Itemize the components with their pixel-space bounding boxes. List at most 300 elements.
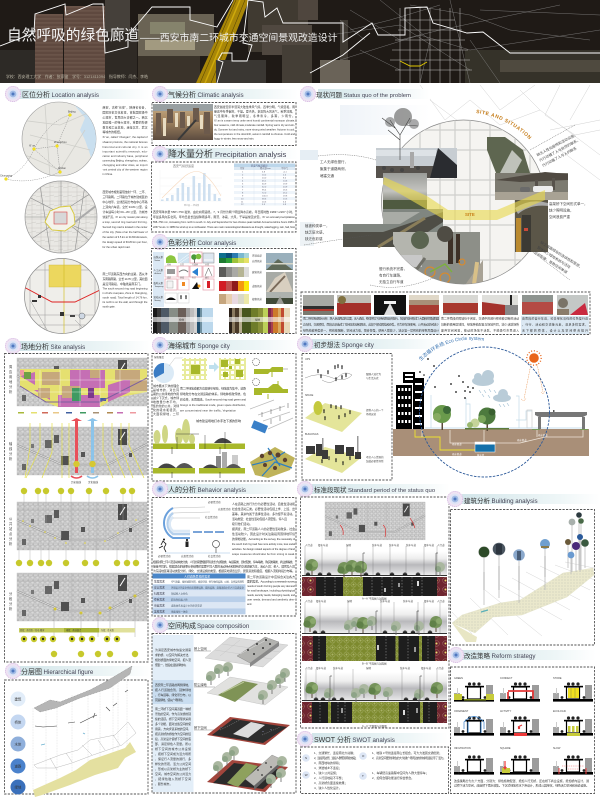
map: traffic flow with arrows xyxy=(17,418,147,484)
text: sponge right column: 绿地较分布在交通运输的体系。绿地种植较传统，色 xyxy=(180,391,246,396)
bar chart: rainfall xyxy=(153,163,228,208)
diagram: buildings: 加载必要性场所 xyxy=(366,459,384,463)
color icons grid: 天空 xyxy=(180,262,184,266)
left text column: ，行车道等，绿化带分布，以 xyxy=(155,692,191,697)
text: south ring road: its north is on the wall, and through the xyxy=(102,300,148,304)
strategy description text: 改造策略分为九个方面，分别为：绿色植物配置、增加人行天桥，还在桥下商业设施，增加桥内设计，通 xyxy=(454,778,589,783)
photo: street with parked scooters xyxy=(376,148,457,178)
left text column: 为满足西安城市快速交通需 xyxy=(155,647,191,652)
section a-a: 快车车道 xyxy=(372,543,383,547)
text blocks under photos: 由南段的自行车道，可沿绿化沿线的红色慢行道 xyxy=(522,316,588,320)
vertical map labels: 线 xyxy=(9,446,13,451)
pipes and storage tank: 雨水管道 xyxy=(517,438,527,442)
left text column: 部，满足绿色人流量。所以 xyxy=(155,741,191,746)
swot text: 1、交通繁忙、连接南北大动脉； xyxy=(314,750,356,755)
table: human needs xyxy=(152,573,246,614)
text: behavior table side: user needs, demand and aesthetic dem- xyxy=(247,598,295,602)
layer: combined xyxy=(207,746,288,792)
text: precipitation description: 西安年降水量 558～750 毫米，由北向南递增。7、9 月份为两个明显降水高峰。年日照时数 1983～2267 小时， xyxy=(153,209,295,214)
text: sponge left column: 期约公共绿地的作用 xyxy=(153,391,179,396)
pins with photos xyxy=(478,512,589,605)
people icons row xyxy=(158,538,230,558)
swot icons: S xyxy=(305,756,307,760)
callout: seating: 行行动植了人与人的联系 xyxy=(541,145,578,168)
map circle with photos xyxy=(343,108,568,284)
layer circles: 桥体 xyxy=(14,720,22,724)
callout: workers parking xyxy=(318,155,376,178)
section c-c xyxy=(302,666,447,728)
text: sponge left column: 城市蓄水下渗的理念 xyxy=(153,383,179,388)
text: sponge right column: foreign to the traditional mode, green space distribution, xyxy=(180,403,246,407)
left text column: 南二环桥下空间其双面一种桥 xyxy=(155,706,191,711)
text: south ring road: The south second ring road beginning xyxy=(102,286,148,290)
layer: road network xyxy=(34,722,136,770)
callout: seating: 缺乏人性化座椅和活动设施， xyxy=(535,132,578,157)
strategy store xyxy=(553,677,593,702)
callout: green continuity: 空间衔接，导致空间单调 xyxy=(533,250,569,275)
layer: green space xyxy=(206,662,290,705)
table: human needs: 归属需求 xyxy=(154,591,165,595)
strategy description text: 过桥下活力空间，改造桥下雨水收集。下沉式绿地作水下渗设计，形成公园绿化，绿色活力空间和街道设施。 xyxy=(454,782,589,788)
section a-a: 绿地 xyxy=(346,543,352,547)
heading: water scenarios: 城市建设场地打水手法下游的影响 xyxy=(196,418,241,423)
section c-c: C—C' 平面图与剖面图 xyxy=(362,724,387,728)
photo: city skyline xyxy=(153,104,213,140)
text: sponge left column: 减少下沉式，城市绿 xyxy=(153,395,179,400)
map: zoning: 东段：住宅区 xyxy=(101,628,115,632)
strategy description text xyxy=(454,778,589,788)
left text column: 把高架桥的桥柱作为空间的链 xyxy=(155,731,191,736)
pipes and storage tank: 雨水管道 xyxy=(452,442,462,446)
table: monthly rainfall: 11 xyxy=(241,201,244,203)
left text column: 求的桥，以空间为解决方法， xyxy=(155,652,191,657)
section b-b: 慢车车道 xyxy=(316,599,327,603)
section a-a: 人行道 xyxy=(305,543,313,547)
swot text: 2、人行道地段不平整； xyxy=(314,775,345,780)
callout: green monotony xyxy=(304,223,372,245)
swot text: 1、车辆绕高速路程中空间为人群大量停车； xyxy=(372,770,429,775)
panel: space composition xyxy=(152,617,298,793)
strategy green xyxy=(454,677,494,702)
section a-a: 慢车车道 xyxy=(318,543,329,547)
panel: standard period of the status quo xyxy=(297,481,450,728)
diagram: space: 场地运营 xyxy=(366,412,377,416)
section c-c: 慢车车道 xyxy=(421,666,432,670)
text: Xi'an intro: cation and industry base, peripheral xyxy=(102,154,148,158)
text: precipitation description xyxy=(153,209,295,229)
layer: bridge xyxy=(35,690,128,727)
table: monthly rainfall: 2 xyxy=(242,174,244,176)
icon: sun xyxy=(521,351,545,401)
table: monthly rainfall: 平均/℃ xyxy=(281,166,289,170)
layer labels: 桥上空间 xyxy=(194,646,207,651)
text: ring road plan: the section of 3.5 km to 34.84 kilometers, xyxy=(102,235,148,239)
strategy ornament: ORNAMENT xyxy=(454,710,469,713)
heading: climate: 气候分析Climatic analysis xyxy=(168,90,244,99)
layer labels xyxy=(194,646,222,730)
color swatches: 环境色彩 xyxy=(252,254,263,258)
table: human needs: 生理需求 xyxy=(154,579,165,583)
left text column: 把人行道融合到，延伸绿地 xyxy=(155,687,191,692)
table: human needs: 地面绿化一体化 xyxy=(171,609,188,613)
callout: seating xyxy=(530,125,584,168)
callout: under bridge: 高架桥下空间形式单一， xyxy=(549,201,588,206)
callout: green continuity xyxy=(530,240,584,280)
swot text xyxy=(314,750,446,790)
table: monthly rainfall: 降水量/mm xyxy=(260,166,271,170)
table: monthly rainfall: 10.2 xyxy=(262,174,267,176)
panel: hierarchical figure xyxy=(4,663,150,797)
curved heading: site and situation: SITE AND SITUATION xyxy=(476,110,532,140)
vertical map labels: 分 xyxy=(9,536,13,541)
table: monthly rainfall: 72.0 xyxy=(262,192,267,194)
left text column: 规划桥面的绿地空间，把人流 xyxy=(155,657,191,662)
table: monthly rainfall: 3 xyxy=(242,177,244,179)
heading: sponge city: 海绵城市Sponge city xyxy=(168,341,231,350)
callout: workers parking: 堵塞交通 xyxy=(320,173,334,178)
text: precipitation description: 2267 hours. In 1985 the wind up to a northeaster. There are main meteorological disasters as drought, waterlogging, rain, hail, frost xyxy=(153,225,295,229)
table: human needs: 道路体系和设计中的审美需求 xyxy=(171,603,203,607)
map: bus stations xyxy=(16,488,147,566)
heading: standard period: 标准段现状 Standard period of the status quo xyxy=(314,485,436,494)
layer: under bridge xyxy=(207,717,290,745)
illustration: eco cycle section xyxy=(393,336,589,478)
lattice before xyxy=(182,358,207,380)
left text column: 聚集一，然后在连续绿地中。 xyxy=(155,662,188,667)
color icons grid xyxy=(165,252,214,303)
layer labels: 桥下空间 xyxy=(194,725,207,730)
strategy slow: SLOW xyxy=(553,747,561,750)
color icons grid: 桥梁 xyxy=(180,276,184,280)
table: human needs: 人对道路景观的需求 xyxy=(184,573,210,578)
text: behavior table side: needs, security needs, belonging needs, and xyxy=(247,593,296,597)
table: human needs: 舒适性和私人性 xyxy=(171,597,188,601)
callout: under bridge: 空间浪费严重 xyxy=(549,214,570,219)
section b-b xyxy=(302,599,447,666)
map: zoning xyxy=(17,573,147,657)
people icons row: 自发性活动 xyxy=(181,554,194,558)
strategy connect: CONNECT xyxy=(500,677,513,680)
text: sponge right column: 南二环绿地成都方向较狭窄绿地，绿地较为集中，道路 xyxy=(180,386,246,390)
text: south ring road: 东南路南路，全长 14.76 公里，其北面 xyxy=(102,276,148,281)
strategy square xyxy=(500,747,540,775)
heading: initial idea: 初步想法Sponge city xyxy=(314,340,375,349)
label: site: SITE xyxy=(465,212,475,217)
table: monthly rainfall: 2.4 xyxy=(283,174,287,176)
text: sponge left column: 集约化的公共，对绿 xyxy=(153,403,179,408)
text: climate description: 量适中冬季偏寒，干燥。夏炎热，多雷阵大风天气，秋季凉爽， xyxy=(214,108,295,114)
swot text: 1、缺少公共设施； xyxy=(314,770,339,775)
text: ring road plan: Second ring road is located in the center xyxy=(102,225,148,229)
pipes and storage tank: 雨水管道 xyxy=(538,433,548,437)
text: ring road plan: 三环路网。二环路位于城市建成区的 xyxy=(102,194,148,199)
section c-c: 人行道 xyxy=(305,666,313,670)
table: human needs: 发展需求 xyxy=(154,609,165,613)
panel: building analysis xyxy=(447,491,600,645)
section c-c: 绿地 xyxy=(366,666,372,670)
text: sponge right column: 彩也单，无雨露感。South second ring road green and xyxy=(180,396,246,402)
heading: hierarchical: 分层图Hierarchical figure xyxy=(21,667,94,676)
section b-b: 快车车道 xyxy=(403,599,414,603)
photo strip panel xyxy=(301,292,590,334)
strategy connect xyxy=(500,677,540,702)
diagram: buildings: 考虑人心资源的 xyxy=(366,455,384,459)
map: zoning: 西段：商住区 / 住宅·教育 xyxy=(20,628,45,632)
map: Xi'an ring roads xyxy=(25,180,97,255)
text: south ring road xyxy=(102,271,148,308)
color element categories xyxy=(153,252,164,307)
diagram: space: SPACE xyxy=(305,394,314,397)
text: behavior right column: 人在道路上的行为分为必要性活动、自发性活动和 xyxy=(232,501,295,506)
bar chart: rainfall: 降水量 — 舒适度 xyxy=(184,203,199,207)
left text column: ，服务城市。 xyxy=(155,781,172,786)
map: traffic flow with arrows: 文化轴线 xyxy=(88,480,99,484)
map: zoning: 南段：商业混合 xyxy=(66,628,82,632)
ring chart xyxy=(164,500,231,538)
text: behavior right column: 活动类型：社会性活动包括人流密集，停人且 xyxy=(232,516,287,521)
swot text: 2、如何合理功能进行综合整合。 xyxy=(372,775,414,780)
text: behavior right column: 社会性活动三类。必要性活动包括上学、上班、出 xyxy=(232,506,295,511)
table: monthly rainfall: 8 xyxy=(242,192,244,194)
vertical guide lines xyxy=(33,676,127,790)
bridge xyxy=(532,410,588,430)
diagram: ups xyxy=(305,358,382,382)
color swatches: 道路色彩 xyxy=(252,284,263,288)
panel: sponge city xyxy=(152,337,298,481)
vertical map labels xyxy=(9,364,13,611)
text: Xi'an intro: important scientific research, edu- xyxy=(102,150,148,154)
left text column: 接，高架设计使桥下空间的底 xyxy=(155,736,191,741)
text: sponge right column xyxy=(180,386,246,412)
color icons grid: 行道树 xyxy=(192,262,198,266)
section b-b: 慢车车道 xyxy=(424,599,435,603)
color swatches: 建筑色彩 xyxy=(252,270,263,274)
heading: color: 色彩分析Color analysis xyxy=(168,238,236,247)
text: south ring road: south road). Total length of 14.76 km, xyxy=(102,296,148,300)
table: human needs: 尊重需求 xyxy=(154,597,165,601)
table: human needs: 环境设计的安全性和无障碍设施、避险设施、道路改造中的人行交通安全 xyxy=(171,585,245,589)
strategy activity: ACTIVITY xyxy=(500,710,512,713)
text: precipitation description: 年最多风向东北风。年均日最长连续降雨多年，雨涝、冰雹、大风，干旱是常见灾害。Xi' an annual precipitation xyxy=(153,214,295,219)
callout: green monotony: 缺乏色彩感 xyxy=(305,236,323,241)
layer circles xyxy=(10,692,26,794)
color icons grid: 水体 xyxy=(205,262,209,266)
text: south ring road: in chuifu overpass, Zone in Xiangfeng, xyxy=(102,291,148,295)
text blocks under photos: 南二环南段的围墙处于闭塞，交通中的通行视线被切断的活动 xyxy=(441,316,519,320)
table: monthly rainfall: 19.9 xyxy=(283,183,288,185)
text: Xi'an intro: 西安，古称“长安”，陕西省省会， xyxy=(102,104,148,110)
text: behavior table side: and. xyxy=(247,602,252,606)
light skyline xyxy=(425,395,585,428)
table: monthly rainfall: 8.0 xyxy=(283,177,287,179)
table: monthly rainfall: 100.3 xyxy=(262,195,268,197)
table: human needs: 安全需求 xyxy=(154,585,165,589)
text: Xi'an intro: -ant central city of the western region xyxy=(102,168,148,172)
text: behavior right column: the south 2nd ring road has more activity more, less social xyxy=(232,542,295,546)
color icons grid: 绿地 xyxy=(167,262,171,266)
vertical map labels: 析 xyxy=(9,456,13,461)
text: Xi'an intro: 国家历史文化名城，首批国家级中 xyxy=(102,110,148,114)
text: ring road plan: 上双向六车道，全长 34.84 公里，设 xyxy=(102,204,148,209)
text: Xi'an intro: historical and cultural city. It is an xyxy=(102,145,148,149)
diagram: buildings: BUILDINGS xyxy=(305,433,319,436)
panel: reform strategy xyxy=(448,647,596,794)
pie chart: 绿色覆盖 xyxy=(154,355,165,359)
color swatches: 植物色彩 xyxy=(252,297,263,301)
text blocks under photos: 割断的使用区域性，绿地种植配置与场地共同，缺少活跃场所 xyxy=(441,322,519,326)
diagram: ups: 与生活方式 xyxy=(366,376,379,380)
text: climate description xyxy=(214,104,296,140)
text: ring road plan: 中心地带，全线四段分布在中心环路 xyxy=(102,199,148,204)
swot text: 4、缺少人性化设计。 xyxy=(314,785,342,790)
heading: building: 建筑分析Building analysis xyxy=(464,496,538,505)
vertical map labels: 析 xyxy=(9,606,13,611)
layer: green space xyxy=(33,742,136,797)
color element categories: 自然元素 xyxy=(154,255,164,259)
callout: green continuity: 缺乏道路绿化的连续性和景观， xyxy=(539,240,584,270)
color photos xyxy=(266,253,293,304)
photo: foggy road xyxy=(383,173,427,209)
text blocks under photos: ，行行、活动和交流等元素，满足多样需求， xyxy=(522,322,588,326)
color swatches xyxy=(219,253,263,304)
water network diagram xyxy=(250,400,293,433)
text: sponge left column: 是城市的，对比同 xyxy=(153,387,179,392)
text: behavior full width: 根据对南二环人流活动种类分类，人们的需要根据环境划分为通勤类、车运客类、街坊配类、停车等类、购买类等类、商业类等类、 xyxy=(153,559,295,564)
table: human needs: 审美需求 xyxy=(154,603,165,607)
icon: bare tree xyxy=(382,108,419,160)
vertical map labels: 轴 xyxy=(9,441,12,446)
heading: behavior: 人的分析Behavior analysis xyxy=(168,485,246,494)
swot text: 2、连接周边景、连接人群聚落南北地段； xyxy=(314,755,358,760)
color element categories: 临时元素 xyxy=(154,281,164,285)
table: monthly rainfall: 24.9 xyxy=(283,186,288,188)
callout: workers parking: 工人无绿色慢行， xyxy=(320,159,348,164)
text: sponge left column: 大面积绿地，二环 xyxy=(153,411,179,416)
color icons grid: 建筑 xyxy=(167,276,171,280)
table: monthly rainfall: 25.2 xyxy=(283,192,288,194)
table: monthly rainfall: 7 xyxy=(242,189,244,191)
text: behavior right column: 性活动较少。因此设计时关注路段周围绿地环境 xyxy=(232,531,295,536)
table: monthly rainfall: 58.6 xyxy=(262,198,267,200)
diagram: buildings xyxy=(305,433,384,473)
map: land use xyxy=(17,358,147,407)
map: China region: Beijing xyxy=(68,110,76,114)
left text column: 西安南二环道路的两侧绿地， xyxy=(155,682,191,687)
text: behavior right column: scape measures should also be from strong to weak. xyxy=(232,552,295,556)
text: ring road plan: for the urban rapid road. xyxy=(102,245,131,249)
swot text: 1、地铁 3 号线连接南山长组合，可大力发展交通优势； xyxy=(372,750,442,755)
text: behavior table side: for road landscape, including physiological xyxy=(247,588,295,592)
diagram: space: 提供人心的一个 xyxy=(366,408,384,412)
vertical map labels: 分 xyxy=(9,601,13,606)
heading: precipitation: 降水量分析 Precipitation analysis xyxy=(168,148,287,159)
section c-c: 人行道 xyxy=(436,666,444,670)
text blocks under photos: 高架柱，交通桥体，南段高架造成了空间压抑感和隔离，此段下部也围挡和杂乱，作为停车场使用，公共活动空间缺少 xyxy=(303,322,439,326)
strategy infiltration xyxy=(454,747,494,775)
swot icons: T xyxy=(362,774,364,778)
text: climate description: 西安属暖温带半湿润大陆性季风气候，四季分明，气候温和，雨 xyxy=(214,104,295,109)
section a-a: 慢车车道 xyxy=(424,543,435,547)
layer circles: 绿地 xyxy=(14,784,22,790)
highlighted road band xyxy=(383,177,545,220)
text: climate description: foggy in winter, less snow and rain. xyxy=(214,136,255,140)
text: behavior full width: 为东段地区等活动类型分析，绿化、交通设施的类型，根据实地调查显示，居民意愿积极度，根据人流和时段分布等。 xyxy=(153,568,295,573)
panel: climatic analysis xyxy=(152,86,298,146)
heading: location: 区位分析Location analysis xyxy=(22,90,99,99)
text blocks under photos: 南二环的场地现状分析：路人走道两边的立面，无人通道，整体环境下没有得到改善提升。东段的空间形成了大面积的围墙肌理 xyxy=(303,316,439,320)
text: Xi'an intro: 心城市，世界四大古都之一。西北 xyxy=(102,114,148,120)
text: climate description: 气温骤降，秋季雨明显，冬季寒冷，多雾，少雨雪。 xyxy=(214,113,295,118)
strategy square: SQUARE xyxy=(500,747,511,750)
ring chart: 社会性活动 xyxy=(205,515,218,519)
section a-a: 快车车道 xyxy=(406,543,417,547)
map: China region: Xi' an xyxy=(29,144,36,148)
text: Xi'an intro: chongqing and other cities, an import xyxy=(102,163,148,167)
section c-c: 慢车车道 xyxy=(316,666,327,670)
text: behavior right column: 的绿地功能。According to the survey, the necessity of xyxy=(232,536,295,541)
section b-b: 人行道 xyxy=(437,599,445,603)
left text column xyxy=(152,635,194,792)
left text column: 景色的空间，作为高架桥的延 xyxy=(155,711,191,716)
vertical map labels: 点 xyxy=(9,531,13,536)
diagram: space xyxy=(305,394,384,432)
text: behavior table side: 南二环的道路设计中应综合关注各方 xyxy=(247,574,295,579)
panel: status quo of the problem xyxy=(300,85,600,335)
map: China region: Zhengzhou xyxy=(54,141,67,144)
color element categories: Nature xyxy=(154,259,160,262)
table: monthly rainfall: 5 xyxy=(242,183,244,185)
vertical map labels: 周 xyxy=(9,364,12,369)
table: monthly rainfall: 52.0 xyxy=(262,186,267,188)
clouds and rain xyxy=(472,370,511,407)
text blocks under photos xyxy=(302,316,589,334)
left text column: 空间。城市空间的公共活力 xyxy=(155,771,191,776)
table: human needs: 空气质量、绿化/遮阴/光照、噪音控制、停车/休闲设施、公厕、自然及景观等 xyxy=(171,579,245,583)
left text column: 用需，方向步道系统的空间， xyxy=(155,726,191,731)
photo: road in fog with green belt xyxy=(343,209,443,247)
vertical map labels: 析 xyxy=(9,389,13,394)
table: monthly rainfall: 24.0 xyxy=(262,177,267,179)
text: climate description: dy, Summer hot and rainy, more strong wind weather. Autumn is cool, xyxy=(214,128,295,132)
text blocks under photos: 无下部的桥体，设计以及空间整合提升 xyxy=(522,328,588,332)
color icons grid: 标识 xyxy=(192,276,196,280)
map: China region: Wuhan xyxy=(58,167,66,170)
dashed eco circle xyxy=(420,347,550,477)
text: behavior right column xyxy=(232,501,296,556)
table: monthly rainfall: 60.9 xyxy=(262,183,267,185)
callout: under bridge: 缺少照明设施， xyxy=(549,208,574,212)
lattice after xyxy=(219,358,246,380)
pie chart xyxy=(154,355,183,383)
swot text: 3、高架桥负面连续效果； xyxy=(314,780,347,785)
curved label: eco circle: 生态循环系统 Eco Circle system xyxy=(419,336,484,361)
table: monthly rainfall: 月份 xyxy=(240,166,245,170)
callout: slow traffic xyxy=(370,266,433,287)
pipes and storage tank: 雨水管道 xyxy=(452,452,462,456)
left text column: 样化的景观，活力公共空间 xyxy=(155,761,191,766)
photo: bicycles on sidewalk xyxy=(393,226,483,287)
table: monthly rainfall: -0.1 xyxy=(283,171,288,173)
pipes and storage tank xyxy=(415,430,583,457)
left text column: 桥下空间的城市公共设施 xyxy=(155,746,191,751)
callout: green monotony: 缺乏层次感， xyxy=(305,230,326,234)
table: monthly rainfall: 19.8 xyxy=(283,195,288,197)
callout: workers parking: 聚集于道路两侧， xyxy=(320,166,348,171)
title: 自然呼吸的绿色廊道 xyxy=(7,27,140,44)
left text column: ，保证行人流量的通行，多 xyxy=(155,756,191,761)
color element categories: Temporary xyxy=(154,285,163,288)
subtitle: ——西安市南二环城市交通空间景观改造设计 xyxy=(140,31,338,44)
